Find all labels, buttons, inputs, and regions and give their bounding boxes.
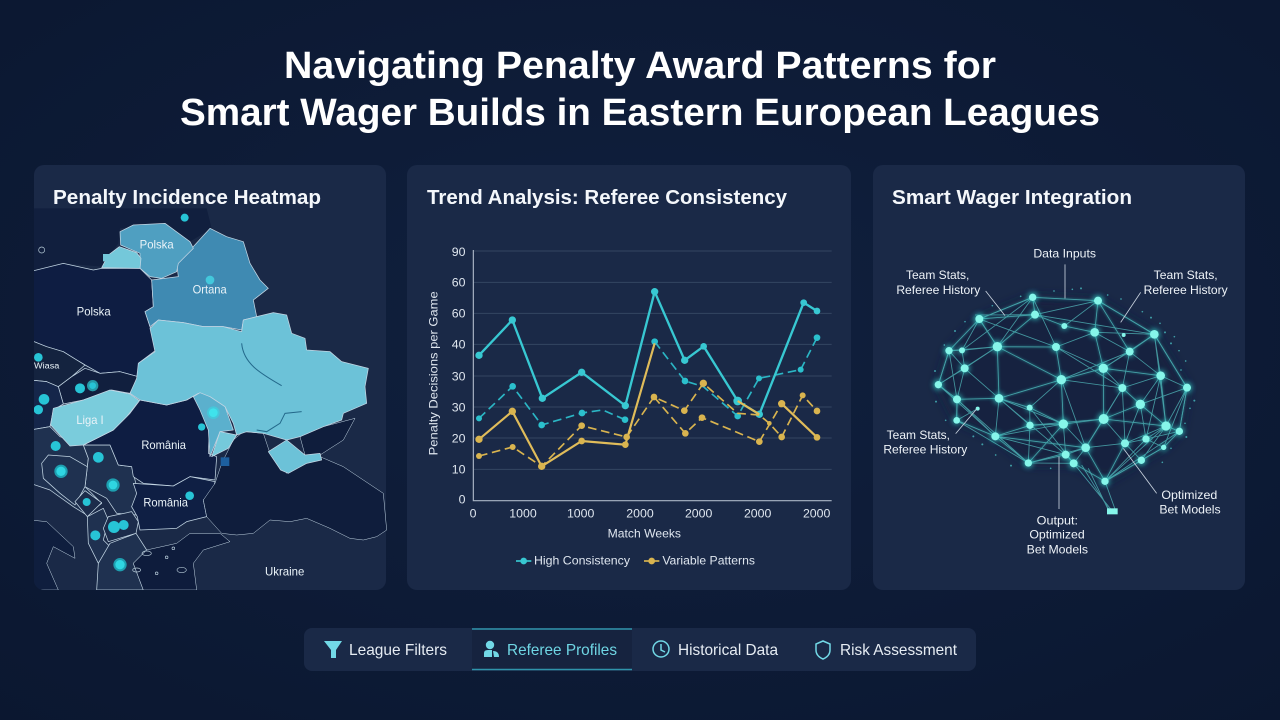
series: gold dashed — [479, 383, 817, 466]
network nodes — [935, 294, 1191, 514]
brain labels: Referee History — [896, 283, 980, 297]
y axis ticks: 20 — [452, 431, 466, 445]
y axis ticks: 10 — [452, 462, 466, 476]
y axis ticks: 30 — [452, 400, 466, 414]
brain labels: Data Inputs — [1033, 247, 1096, 261]
x axis ticks: 1000 — [509, 507, 537, 521]
islands — [39, 247, 186, 575]
map labels: România — [143, 496, 188, 510]
x axis title: Match Weeks — [608, 527, 681, 540]
series: gold solid — [479, 343, 817, 466]
panel: smart wager integration — [873, 165, 1245, 590]
rivers — [242, 343, 302, 432]
y axis ticks — [452, 245, 466, 507]
map labels: România — [141, 438, 186, 452]
legend — [516, 555, 755, 568]
brain labels: Bet Models — [1159, 502, 1221, 516]
y axis ticks: 30 — [452, 369, 466, 383]
x axis ticks: 2000 — [626, 507, 654, 521]
tab: league filters: League Filters — [349, 642, 447, 659]
y axis title: Penalty Decisions per Game — [427, 291, 440, 455]
brain labels: Output: — [1037, 513, 1078, 527]
network edges — [938, 297, 1187, 511]
brain labels: Optimized — [1029, 528, 1085, 542]
map labels — [34, 237, 305, 578]
y axis ticks: 40 — [452, 338, 466, 352]
neural network brain — [883, 247, 1228, 556]
icon: clock — [653, 641, 669, 657]
brain labels: Referee History — [1144, 283, 1228, 297]
brain labels: Team Stats, — [1154, 268, 1218, 282]
legend: High Consistency — [534, 555, 630, 568]
x axis ticks — [470, 507, 831, 521]
panel: trend analysis — [407, 165, 851, 590]
series: teal dashed — [479, 338, 817, 425]
brain labels: Team Stats, — [887, 428, 950, 442]
heading: smart wager: Smart Wager Integration — [892, 187, 1132, 209]
line chart — [427, 245, 832, 568]
icon: shield — [816, 641, 830, 659]
icon: person — [484, 641, 499, 657]
panel: penalty incidence heatmap — [30, 165, 387, 590]
leader lines — [956, 264, 1157, 509]
scattered particles — [934, 287, 1195, 469]
map labels: Polska — [140, 237, 174, 251]
brain labels: Team Stats, — [906, 268, 969, 282]
map labels: Polska — [77, 304, 111, 318]
x axis ticks: 2000 — [803, 507, 831, 521]
active tab highlight — [472, 629, 632, 670]
x axis ticks: 0 — [470, 507, 477, 521]
y axis ticks: 0 — [459, 493, 466, 507]
brain labels — [883, 247, 1228, 556]
tab: risk assessment: Risk Assessment — [840, 642, 958, 659]
y axis ticks: 60 — [452, 307, 466, 321]
grid and axes — [473, 251, 832, 469]
y axis ticks: 60 — [452, 276, 466, 290]
y axis ticks: 90 — [452, 245, 466, 259]
map labels: Liga I — [76, 413, 104, 427]
x axis ticks: 1000 — [567, 507, 595, 521]
network edge glow — [938, 297, 1187, 481]
tab: historical data: Historical Data — [678, 642, 778, 659]
heatmap map — [34, 208, 387, 590]
hotspots — [34, 214, 220, 571]
map labels: Ukraine — [265, 564, 305, 578]
legend: Variable Patterns — [662, 555, 755, 568]
navigation bar — [304, 628, 976, 671]
tab: referee profiles: Referee Profiles — [507, 642, 617, 659]
brain labels: Bet Models — [1027, 542, 1088, 556]
heading: trend analysis: Trend Analysis: Referee Consistency — [427, 187, 788, 209]
title — [180, 45, 1100, 134]
x axis ticks: 2000 — [744, 507, 772, 521]
x axis ticks: 2000 — [685, 507, 713, 521]
network glow — [933, 292, 1192, 486]
icon: funnel — [324, 641, 342, 658]
title: Smart Wager Builds in Eastern European Leagues — [180, 92, 1100, 134]
title: Navigating Penalty Award Patterns for — [284, 45, 996, 87]
series: teal solid — [479, 292, 817, 414]
heading: heatmap: Penalty Incidence Heatmap — [53, 187, 321, 209]
brain labels: Optimized — [1161, 488, 1217, 502]
map labels: Ortana — [193, 282, 227, 296]
map labels: Wiasa — [34, 361, 60, 370]
brain labels: Referee History — [883, 443, 967, 457]
